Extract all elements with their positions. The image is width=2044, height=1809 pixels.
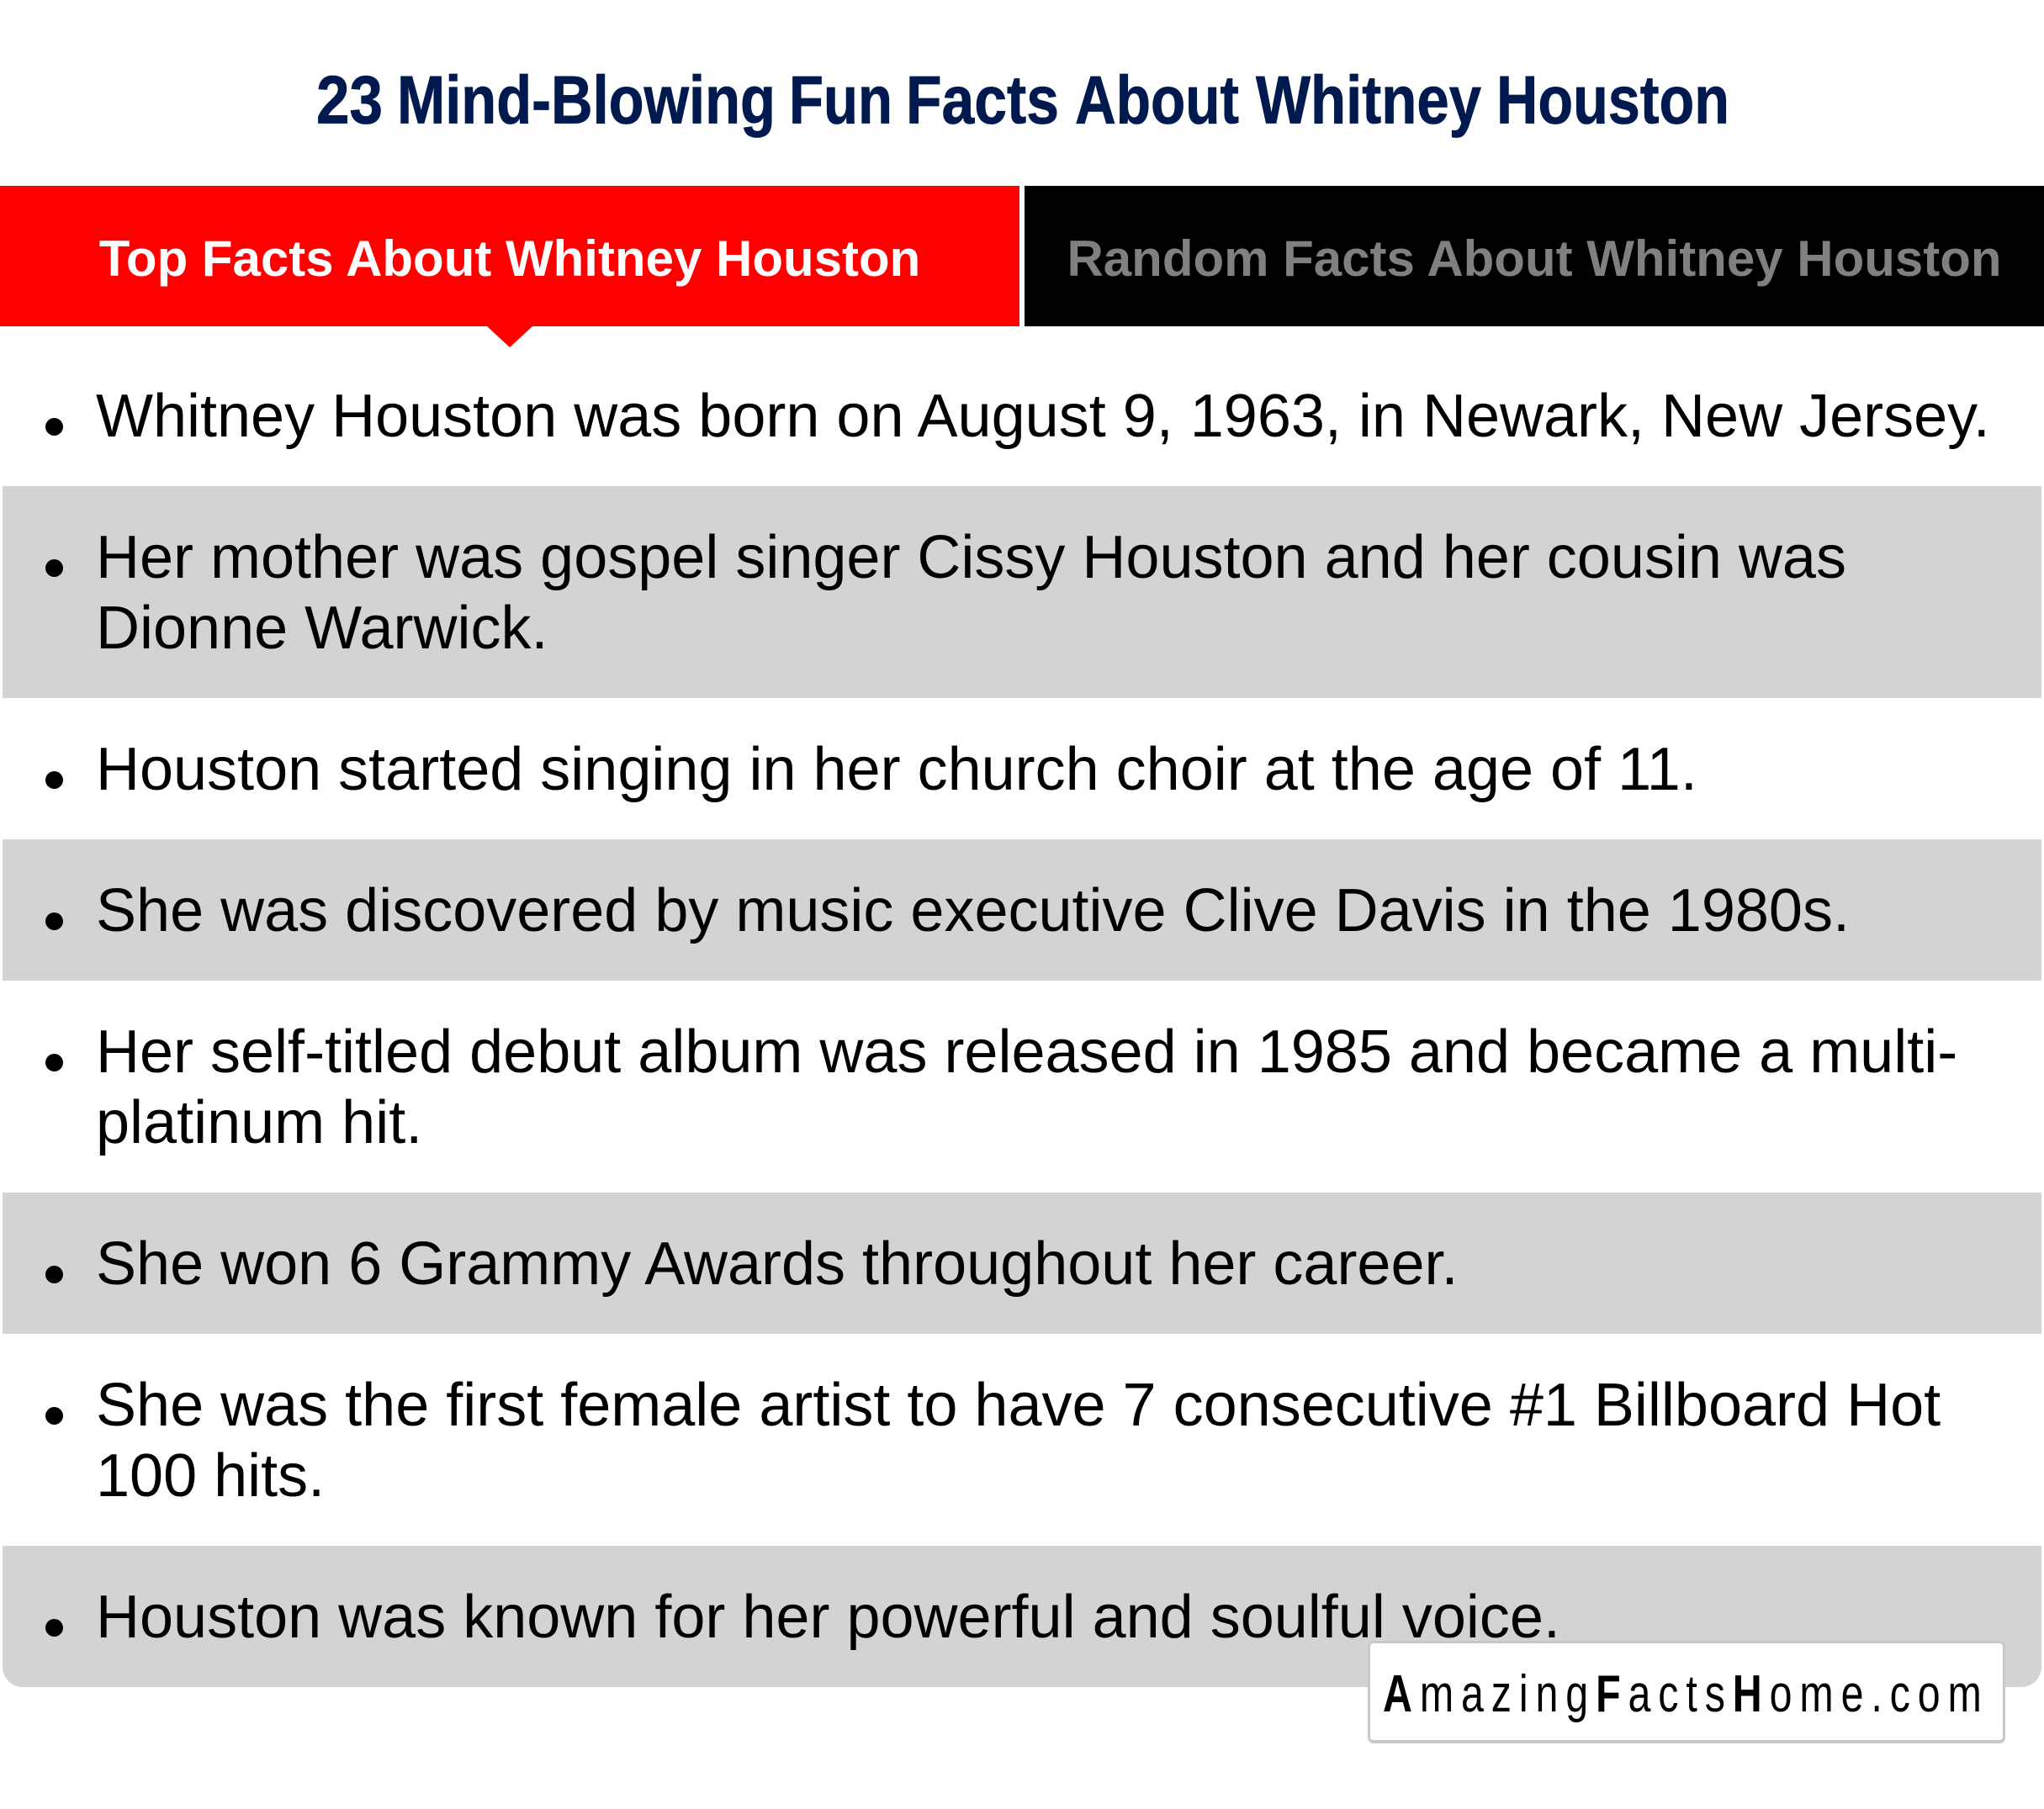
fact 5: platinum hit. [96, 1089, 422, 1156]
fact 8 [3, 1546, 2041, 1687]
tab: top facts (active): Top Facts About Whitney Houston [99, 230, 920, 287]
fact 7: 100 hits. [96, 1442, 325, 1510]
title [316, 62, 1729, 138]
title: Fun [789, 62, 892, 138]
fact 8: Houston was known for her powerful and soulful voice. [96, 1584, 1560, 1651]
fact 2: Her mother was gospel singer Cissy Houston and her cousin was [96, 524, 1846, 591]
title: Houston [1496, 62, 1729, 138]
icon: tab pointer arrow [487, 326, 532, 347]
title: About [1075, 62, 1239, 138]
fact 4: She was discovered by music executive Clive Davis in the 1980s. [96, 877, 1850, 944]
tab: random facts (inactive) [1025, 186, 2044, 326]
fact list [3, 383, 2041, 1687]
fact 4 [3, 839, 2041, 981]
fact 5 [45, 1018, 1957, 1156]
fact 2: Dionne Warwick. [96, 595, 548, 662]
fact 6 [3, 1193, 2041, 1334]
tab: top facts (active) [0, 186, 1019, 326]
fact 7: She was the first female artist to have 7 consecutive #1 Billboard Hot [96, 1372, 1941, 1439]
title: 23 [316, 62, 383, 138]
title: Facts [906, 62, 1059, 138]
title: Whitney [1256, 62, 1481, 138]
fact 1: Whitney Houston was born on August 9, 1963, in Newark, New Jersey. [96, 383, 1990, 450]
watermark badge: AmazingFactsHome.com [1383, 1665, 1989, 1723]
title: Mind-Blowing [397, 62, 776, 138]
fact 7 [45, 1372, 1941, 1510]
fact 2 [3, 486, 2041, 698]
watermark badge [1368, 1641, 2005, 1743]
fact 6: She won 6 Grammy Awards throughout her career. [96, 1230, 1459, 1298]
fact 3: Houston started singing in her church choir at the age of 11. [96, 736, 1697, 803]
fact 5: Her self-titled debut album was released in 1985 and became a multi- [96, 1018, 1957, 1086]
tab: random facts (inactive): Random Facts About Whitney Houston [1067, 230, 2002, 287]
